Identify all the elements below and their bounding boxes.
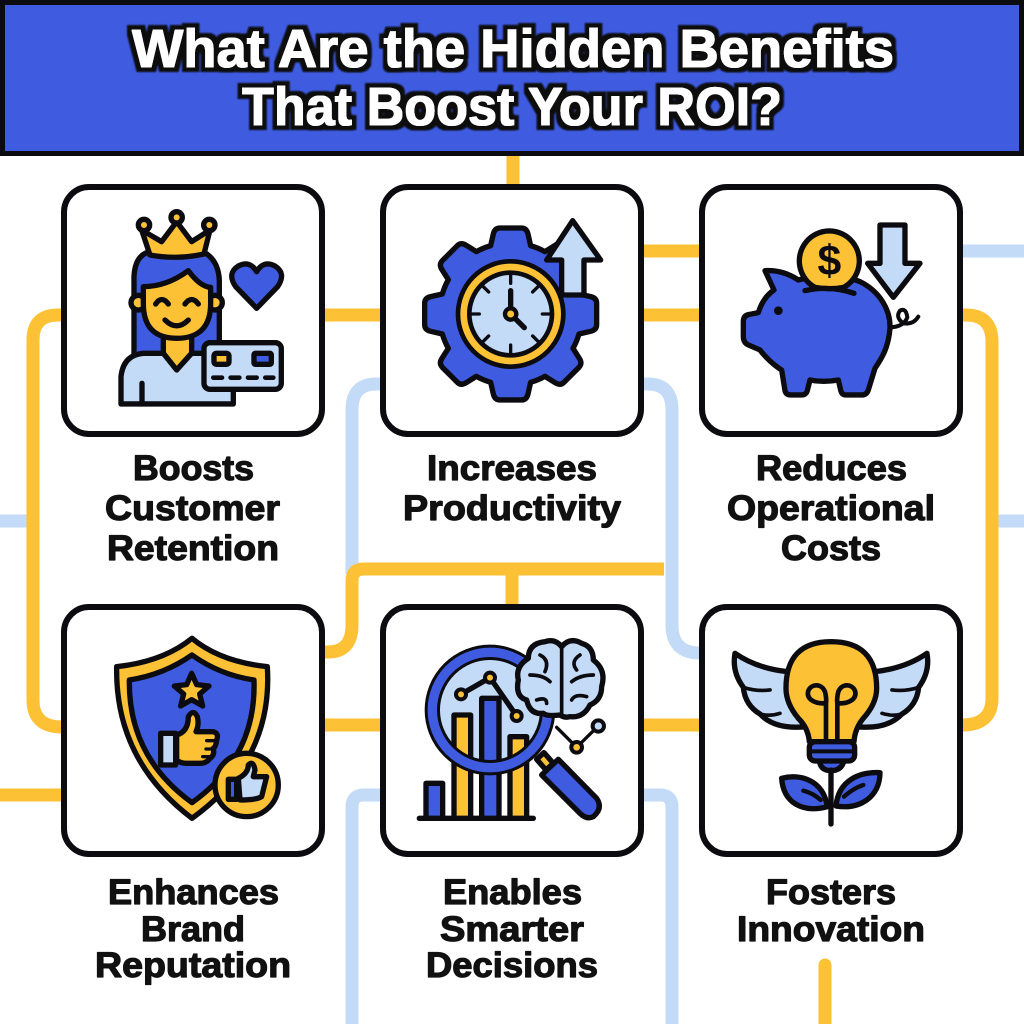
label [426, 873, 598, 985]
panel: enables smarter decisions [383, 607, 641, 985]
label: Smarter [440, 910, 584, 949]
icon: piggy bank with coin: $ [817, 237, 841, 285]
panel: increases productivity [383, 187, 641, 528]
label [95, 873, 291, 985]
label [737, 873, 925, 949]
label: Reputation [95, 946, 291, 985]
label [105, 449, 280, 568]
title [132, 19, 894, 137]
panel: boosts customer retention [64, 187, 322, 568]
label: Brand [141, 910, 245, 949]
icon: winged light bulb with leaves [734, 642, 928, 824]
label: Customer [105, 489, 280, 528]
icon: piggy bank with coin [743, 225, 920, 395]
panel: enhances brand reputation [64, 607, 322, 985]
label: Increases [427, 449, 597, 488]
label: Enhances [108, 873, 279, 912]
icon: customer with crown and card [121, 212, 282, 404]
label: Enables [443, 873, 582, 912]
label: Innovation [737, 910, 925, 949]
label: Productivity [403, 489, 622, 528]
icon: gear clock with up arrow [425, 221, 601, 400]
icon: magnifier with chart and brain [419, 641, 604, 818]
title: What Are the Hidden Benefits [132, 19, 894, 79]
panel: reduces operational costs [702, 187, 960, 568]
title: That Boost Your ROI? [242, 77, 782, 137]
label: Reduces [756, 449, 907, 488]
label [727, 449, 935, 568]
label: Boosts [133, 449, 254, 488]
label: Fosters [766, 873, 896, 912]
label: Decisions [426, 946, 598, 985]
label: Costs [781, 529, 881, 568]
title banner [2, 2, 1022, 154]
label [403, 449, 622, 528]
panel: fosters innovation [702, 607, 960, 949]
label: Retention [107, 529, 279, 568]
icon: shield with thumbs up [117, 638, 278, 818]
label: Operational [727, 489, 935, 528]
